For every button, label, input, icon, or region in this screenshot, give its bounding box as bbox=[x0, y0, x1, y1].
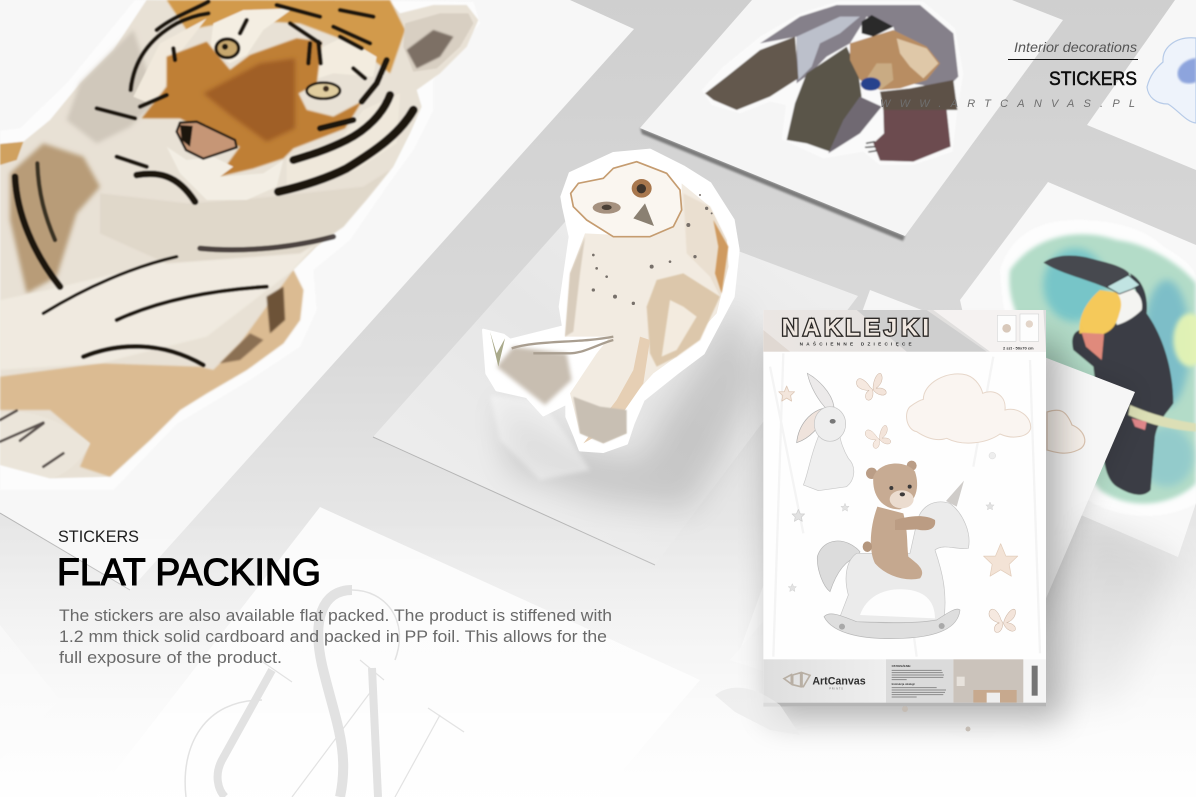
owl branch bbox=[497, 347, 572, 405]
owl ghost reflection bbox=[490, 395, 590, 480]
barcode bbox=[1032, 666, 1038, 696]
owl tail bbox=[573, 397, 627, 443]
neck stripes bbox=[15, 177, 60, 287]
owl wing lower bbox=[647, 273, 720, 367]
panel: sticker package bbox=[763, 310, 1046, 707]
bunny head bbox=[814, 407, 846, 441]
bear left eye bbox=[889, 486, 893, 490]
logo wordmark: ArtCanvas bbox=[812, 675, 866, 687]
fade over lower background bbox=[0, 520, 1196, 797]
star beige large bbox=[984, 544, 1018, 576]
butterfly low bbox=[986, 605, 1019, 636]
sheet: left lower bbox=[0, 625, 60, 760]
bear snout bbox=[867, 63, 893, 90]
tiger leg bbox=[0, 270, 303, 477]
header white sheet bbox=[933, 310, 1046, 352]
tiger neck gold bbox=[10, 143, 100, 293]
icon: cloud bbox=[907, 374, 1031, 443]
bear nose bbox=[861, 77, 881, 91]
thumbnail two bbox=[1020, 314, 1039, 341]
toucan white throat bbox=[1117, 288, 1142, 325]
section kicker: STICKERS bbox=[58, 527, 139, 546]
icon: stars bbox=[779, 386, 1018, 592]
sheet: tiger bbox=[0, 0, 634, 590]
bear muzzle highlight bbox=[897, 38, 938, 78]
sheet: bear bbox=[640, 0, 1063, 236]
bear outline bbox=[702, 2, 963, 165]
header left diagonal bbox=[763, 330, 790, 352]
star grey low bbox=[788, 584, 796, 592]
watercolor blue wash bbox=[1043, 248, 1107, 322]
pink underbelly bbox=[1132, 418, 1147, 430]
right cheek stripes bbox=[320, 60, 387, 128]
bear arm bbox=[895, 516, 935, 530]
sheet: behind package bbox=[740, 290, 1135, 705]
logo tagline: PRINTS bbox=[829, 688, 844, 690]
product title: NAKLEJKI bbox=[782, 314, 929, 341]
illustration: owl sticker bbox=[483, 150, 760, 510]
header rule bbox=[1008, 59, 1138, 60]
illustration: tiger sticker bbox=[0, 0, 480, 490]
line 1: The stickers are also available flat packed. The product is stiffened with bbox=[59, 606, 612, 625]
bear ears bbox=[866, 468, 877, 479]
sheet paper bbox=[740, 290, 1135, 705]
tiger grey side fur bbox=[67, 30, 157, 143]
bear left limb bbox=[705, 37, 798, 110]
watercolor lime bbox=[1173, 313, 1196, 367]
package header bbox=[763, 310, 1046, 352]
header title: STICKERS bbox=[1049, 68, 1137, 90]
tiger shoulder gold bbox=[0, 142, 23, 165]
bear upper fur bbox=[760, 5, 958, 88]
instruction heading: Instrukcja obsługi: bbox=[892, 682, 915, 686]
package shadow bbox=[770, 340, 1060, 720]
owl pupil right bbox=[637, 184, 646, 193]
rocker bolt right bbox=[939, 623, 945, 629]
owl shadow bbox=[500, 300, 760, 510]
butterfly top bbox=[856, 373, 887, 401]
owl head bbox=[571, 162, 682, 237]
warning lines bbox=[892, 670, 944, 680]
left eye bbox=[216, 39, 239, 58]
owl eye left patch bbox=[593, 202, 621, 214]
product subtitle: NAŚCIENNE DZIECIĘCE bbox=[800, 340, 912, 346]
tiger face orange core bbox=[203, 58, 295, 142]
rocker bolts bbox=[839, 624, 845, 630]
owl speckles bbox=[592, 194, 713, 305]
tiger haunch dark bbox=[267, 287, 285, 333]
bear leg bbox=[873, 110, 951, 162]
bunny body bbox=[803, 435, 854, 491]
tiger face orange bbox=[142, 38, 362, 177]
pearl dots under package bbox=[902, 706, 970, 732]
bear nose bbox=[900, 492, 905, 496]
thumbnail one bbox=[997, 315, 1016, 341]
star grey large bbox=[792, 509, 805, 521]
toucan face patch bbox=[1107, 275, 1140, 294]
bear head bbox=[850, 30, 940, 90]
illustration: toucan sticker bbox=[1000, 220, 1196, 516]
toucan beak bbox=[1043, 256, 1129, 293]
bunny drooping ear bbox=[797, 408, 825, 443]
faint cloud on sheet bbox=[1047, 410, 1085, 453]
owl left edge bbox=[565, 237, 585, 337]
sheet: cloud bbox=[1087, 0, 1196, 170]
sheet: below package bbox=[730, 590, 1030, 745]
right eye bbox=[307, 83, 340, 99]
footer instructions band bbox=[886, 659, 953, 703]
owl eye right bbox=[632, 179, 652, 198]
package footer bbox=[763, 659, 1046, 703]
cloud shape bbox=[1147, 38, 1196, 123]
icon: bunny bbox=[797, 373, 854, 491]
sheet: lower left bbox=[95, 507, 700, 797]
butterfly mid bbox=[865, 425, 891, 449]
bear claws bbox=[865, 142, 877, 152]
bear body bbox=[871, 507, 922, 579]
shadow under right sheet bbox=[1040, 520, 1178, 720]
header band bbox=[763, 310, 1046, 352]
watercolor green wash bbox=[1009, 234, 1196, 503]
paw stripes bbox=[0, 411, 63, 467]
owl sprout bbox=[490, 332, 505, 367]
owl sticker outline bbox=[483, 150, 738, 452]
sheet edge lines bbox=[0, 437, 655, 590]
sticker outline bbox=[1000, 220, 1196, 516]
tiger paw bbox=[0, 412, 90, 478]
owl wing feathers bbox=[662, 300, 697, 357]
unicorn tail bbox=[817, 541, 860, 592]
tiger silhouette bbox=[0, 0, 478, 478]
tiger haunch patch bbox=[220, 333, 263, 363]
section heading: FLAT PACKING bbox=[57, 552, 321, 594]
toucan chest bbox=[1079, 290, 1121, 334]
illustration: bear sticker bbox=[702, 2, 963, 165]
bear chest bbox=[880, 80, 957, 110]
sheet: owl bbox=[373, 195, 858, 565]
tiger lower ruff bbox=[100, 170, 390, 263]
header diagonal paper bbox=[857, 310, 987, 352]
tiger inner ear bbox=[403, 13, 473, 72]
sheet: bear shadow bbox=[640, 128, 905, 241]
unicorn leg gap bbox=[860, 589, 935, 618]
tiger forehead white bbox=[210, 8, 293, 63]
package base bbox=[763, 310, 1046, 707]
tiger light chest bbox=[0, 247, 313, 370]
bear purple limb bbox=[828, 97, 882, 153]
owl talons bbox=[512, 337, 613, 353]
tiger nose bbox=[177, 122, 237, 159]
star beige small bbox=[779, 386, 795, 401]
room crib blanket bbox=[987, 693, 1000, 703]
foil streaks bbox=[770, 353, 1040, 657]
illustration: cloud sticker bbox=[1147, 38, 1196, 123]
unicorn body bbox=[840, 502, 969, 623]
unicorn horn bbox=[946, 481, 964, 507]
website: WWW.ARTCANVAS.PL bbox=[880, 98, 1135, 110]
owl pupil left bbox=[602, 205, 612, 210]
package shadow on toucan bbox=[1000, 358, 1135, 700]
package bottom strip bbox=[763, 703, 1046, 707]
pearl detail bbox=[989, 452, 996, 459]
owl long feather bbox=[583, 337, 650, 443]
bear right eye bbox=[908, 485, 912, 489]
right pupil bbox=[323, 86, 329, 92]
icon: butterflies bbox=[856, 373, 1019, 636]
tiger eyes bbox=[216, 39, 340, 99]
ghost bird under package bbox=[715, 688, 800, 735]
tiger muzzle bbox=[167, 147, 283, 200]
owl body bbox=[565, 183, 728, 443]
owl wing upper bbox=[683, 193, 728, 297]
tiger stripes bbox=[0, 2, 413, 467]
left pupil bbox=[222, 44, 228, 50]
tiger left white fur bbox=[133, 18, 207, 107]
logo icon bbox=[784, 673, 810, 687]
tiger right forehead white bbox=[313, 37, 377, 80]
sheet thumbnails bbox=[997, 314, 1039, 341]
star grey right bbox=[986, 502, 994, 510]
tiger ear dark bbox=[407, 30, 453, 68]
bunny upright ear bbox=[807, 373, 834, 407]
footer left band bbox=[763, 659, 886, 703]
toucan bib bbox=[1082, 333, 1104, 360]
bear middle limb bbox=[787, 47, 862, 152]
bear dark crown bbox=[862, 15, 893, 37]
icon: teddy bear bbox=[863, 461, 935, 579]
tiger top gold band bbox=[167, 0, 405, 73]
branch bbox=[1128, 405, 1196, 432]
star grey small bbox=[841, 503, 849, 511]
icon: rocking unicorn bbox=[817, 481, 969, 639]
bear right ear bbox=[907, 461, 917, 471]
footer room photo bbox=[953, 659, 1023, 703]
watercolor right blue bbox=[1143, 280, 1190, 407]
watercolor lower blue bbox=[1140, 427, 1193, 487]
instruction lines bbox=[892, 688, 946, 697]
thumbnail art two bbox=[1026, 320, 1033, 328]
sheet: toucan bbox=[960, 182, 1196, 557]
sticker outline bbox=[0, 0, 480, 490]
bear eyes bbox=[889, 485, 912, 496]
line 2: 1.2 mm thick solid cardboard and packed in PP foil. This allows for the bbox=[59, 627, 607, 646]
owl beak bbox=[633, 203, 654, 226]
toucan body bbox=[1072, 273, 1173, 495]
bear muzzle bbox=[890, 490, 914, 508]
bear foot bbox=[863, 541, 872, 552]
rocker bbox=[824, 609, 960, 639]
bunny eye bbox=[830, 419, 836, 424]
forehead and face stripes bbox=[131, 2, 373, 107]
watermark swan logo bbox=[185, 590, 464, 797]
room floor and crib bbox=[973, 690, 1017, 703]
tiger right cheek white bbox=[287, 93, 400, 193]
line 3: full exposure of the product. bbox=[59, 648, 282, 667]
header kicker: Interior decorations bbox=[1014, 39, 1137, 55]
thumbnail art one bbox=[1002, 324, 1011, 333]
bear light patch bbox=[797, 17, 860, 80]
bear head bbox=[873, 463, 917, 509]
warning heading: OSTRZEŻENIE: bbox=[892, 663, 911, 668]
muzzle left stripes bbox=[97, 108, 147, 167]
owl wing orange edge bbox=[713, 220, 728, 293]
body text bbox=[59, 606, 612, 667]
room lamp bbox=[957, 677, 965, 686]
size label: 2 szt - 50x70 cm bbox=[1003, 345, 1034, 350]
tiger nostril bbox=[180, 125, 193, 147]
footer right band bbox=[1023, 659, 1046, 703]
cloud swirl bbox=[1178, 58, 1196, 84]
